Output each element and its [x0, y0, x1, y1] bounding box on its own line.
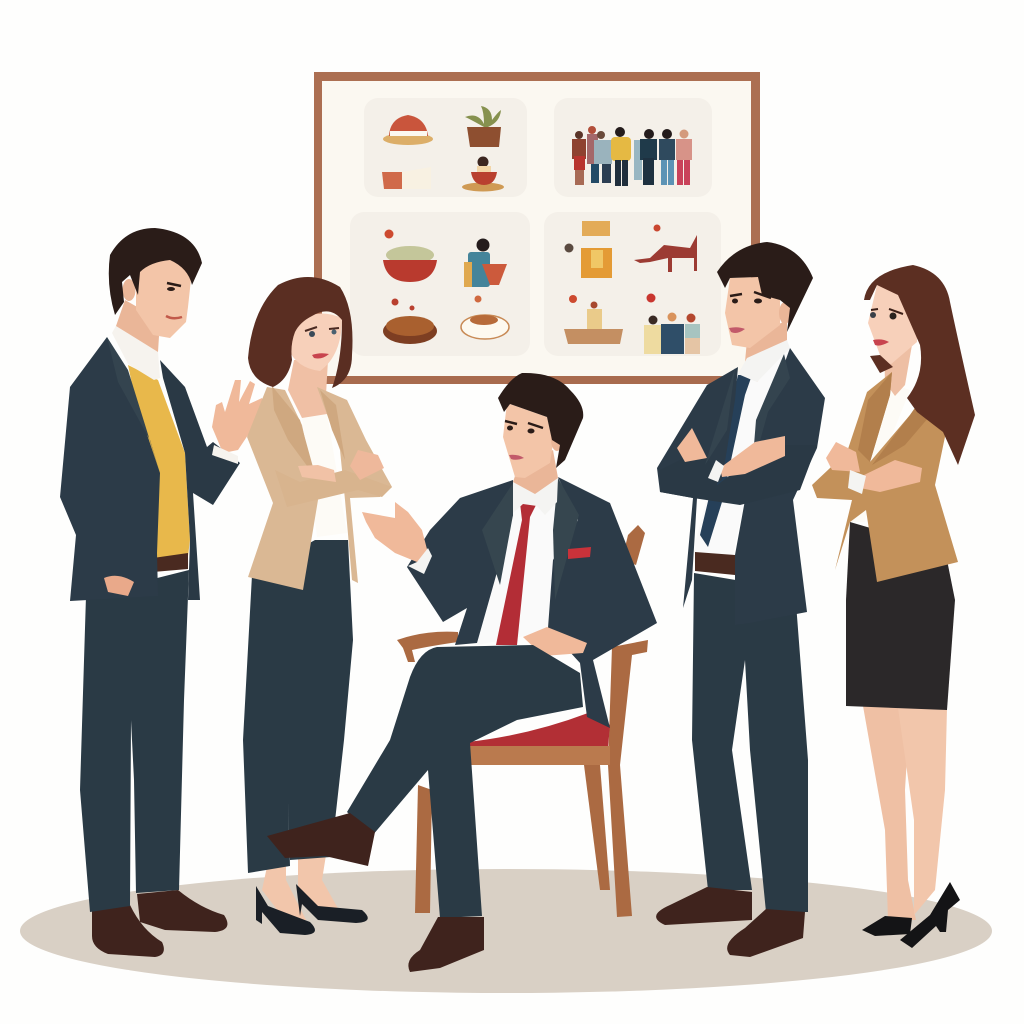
- face features: [305, 327, 339, 331]
- face features: [871, 309, 903, 314]
- heels: [862, 916, 912, 936]
- hair: [864, 265, 975, 465]
- trousers: [347, 645, 583, 918]
- person: woman on far right: [812, 265, 975, 948]
- poster panel: top left: [364, 98, 527, 197]
- neck: [884, 345, 912, 396]
- wall poster: [314, 72, 760, 384]
- face: [725, 277, 780, 348]
- shirt: [693, 348, 790, 555]
- trousers: [692, 573, 808, 912]
- face: [868, 285, 917, 365]
- legs: [863, 706, 916, 920]
- tie: [700, 375, 752, 547]
- crossed arms: [275, 470, 392, 507]
- pocket square: [568, 547, 591, 559]
- face features: [167, 283, 181, 286]
- neck and chest: [288, 360, 328, 418]
- blazer: [812, 372, 958, 582]
- jacket: [407, 480, 513, 645]
- face: [136, 256, 192, 338]
- person: woman in tan blazer: [243, 277, 392, 935]
- shoes: [267, 813, 375, 866]
- person: man on far left: [60, 228, 264, 957]
- top: [302, 413, 347, 537]
- trousers: [80, 570, 189, 912]
- trousers: [243, 540, 353, 873]
- heels: [256, 886, 315, 935]
- floor ellipse: [20, 869, 992, 993]
- face features: [505, 421, 543, 428]
- person: standing man with crossed arms: [656, 242, 825, 957]
- neck: [513, 450, 558, 494]
- poster panel: bottom right scenes: [544, 212, 721, 356]
- belt: [695, 552, 735, 575]
- blazer: [247, 387, 318, 590]
- tie: [496, 503, 537, 645]
- hands: [677, 428, 707, 462]
- raised hand: [212, 380, 264, 453]
- hair: [248, 277, 352, 388]
- person: seated man and chair: [267, 373, 657, 972]
- poster panel: bottom left food: [350, 212, 530, 356]
- collar: [513, 477, 558, 515]
- hair: [109, 228, 202, 315]
- jacket: [657, 367, 738, 608]
- belt: [153, 553, 188, 572]
- jacket: [60, 337, 160, 601]
- chair: [397, 525, 648, 917]
- shoes: [656, 887, 752, 925]
- collar: [738, 340, 790, 382]
- poster panel: top right people: [554, 98, 712, 197]
- shoes: [92, 905, 164, 957]
- resting hand: [523, 627, 587, 656]
- bare ankles: [262, 855, 340, 920]
- skirt: [846, 522, 955, 710]
- top: [850, 385, 910, 522]
- face: [503, 403, 553, 478]
- gesturing hand: [362, 502, 428, 562]
- hands: [826, 442, 860, 472]
- sweater and shirt: [128, 365, 190, 562]
- face: [288, 314, 342, 371]
- neck: [745, 320, 787, 382]
- hand in pocket: [104, 576, 134, 596]
- shirt: [477, 478, 558, 645]
- hair: [498, 373, 583, 468]
- neck: [116, 300, 160, 352]
- face features: [730, 292, 771, 298]
- hair: [717, 242, 813, 332]
